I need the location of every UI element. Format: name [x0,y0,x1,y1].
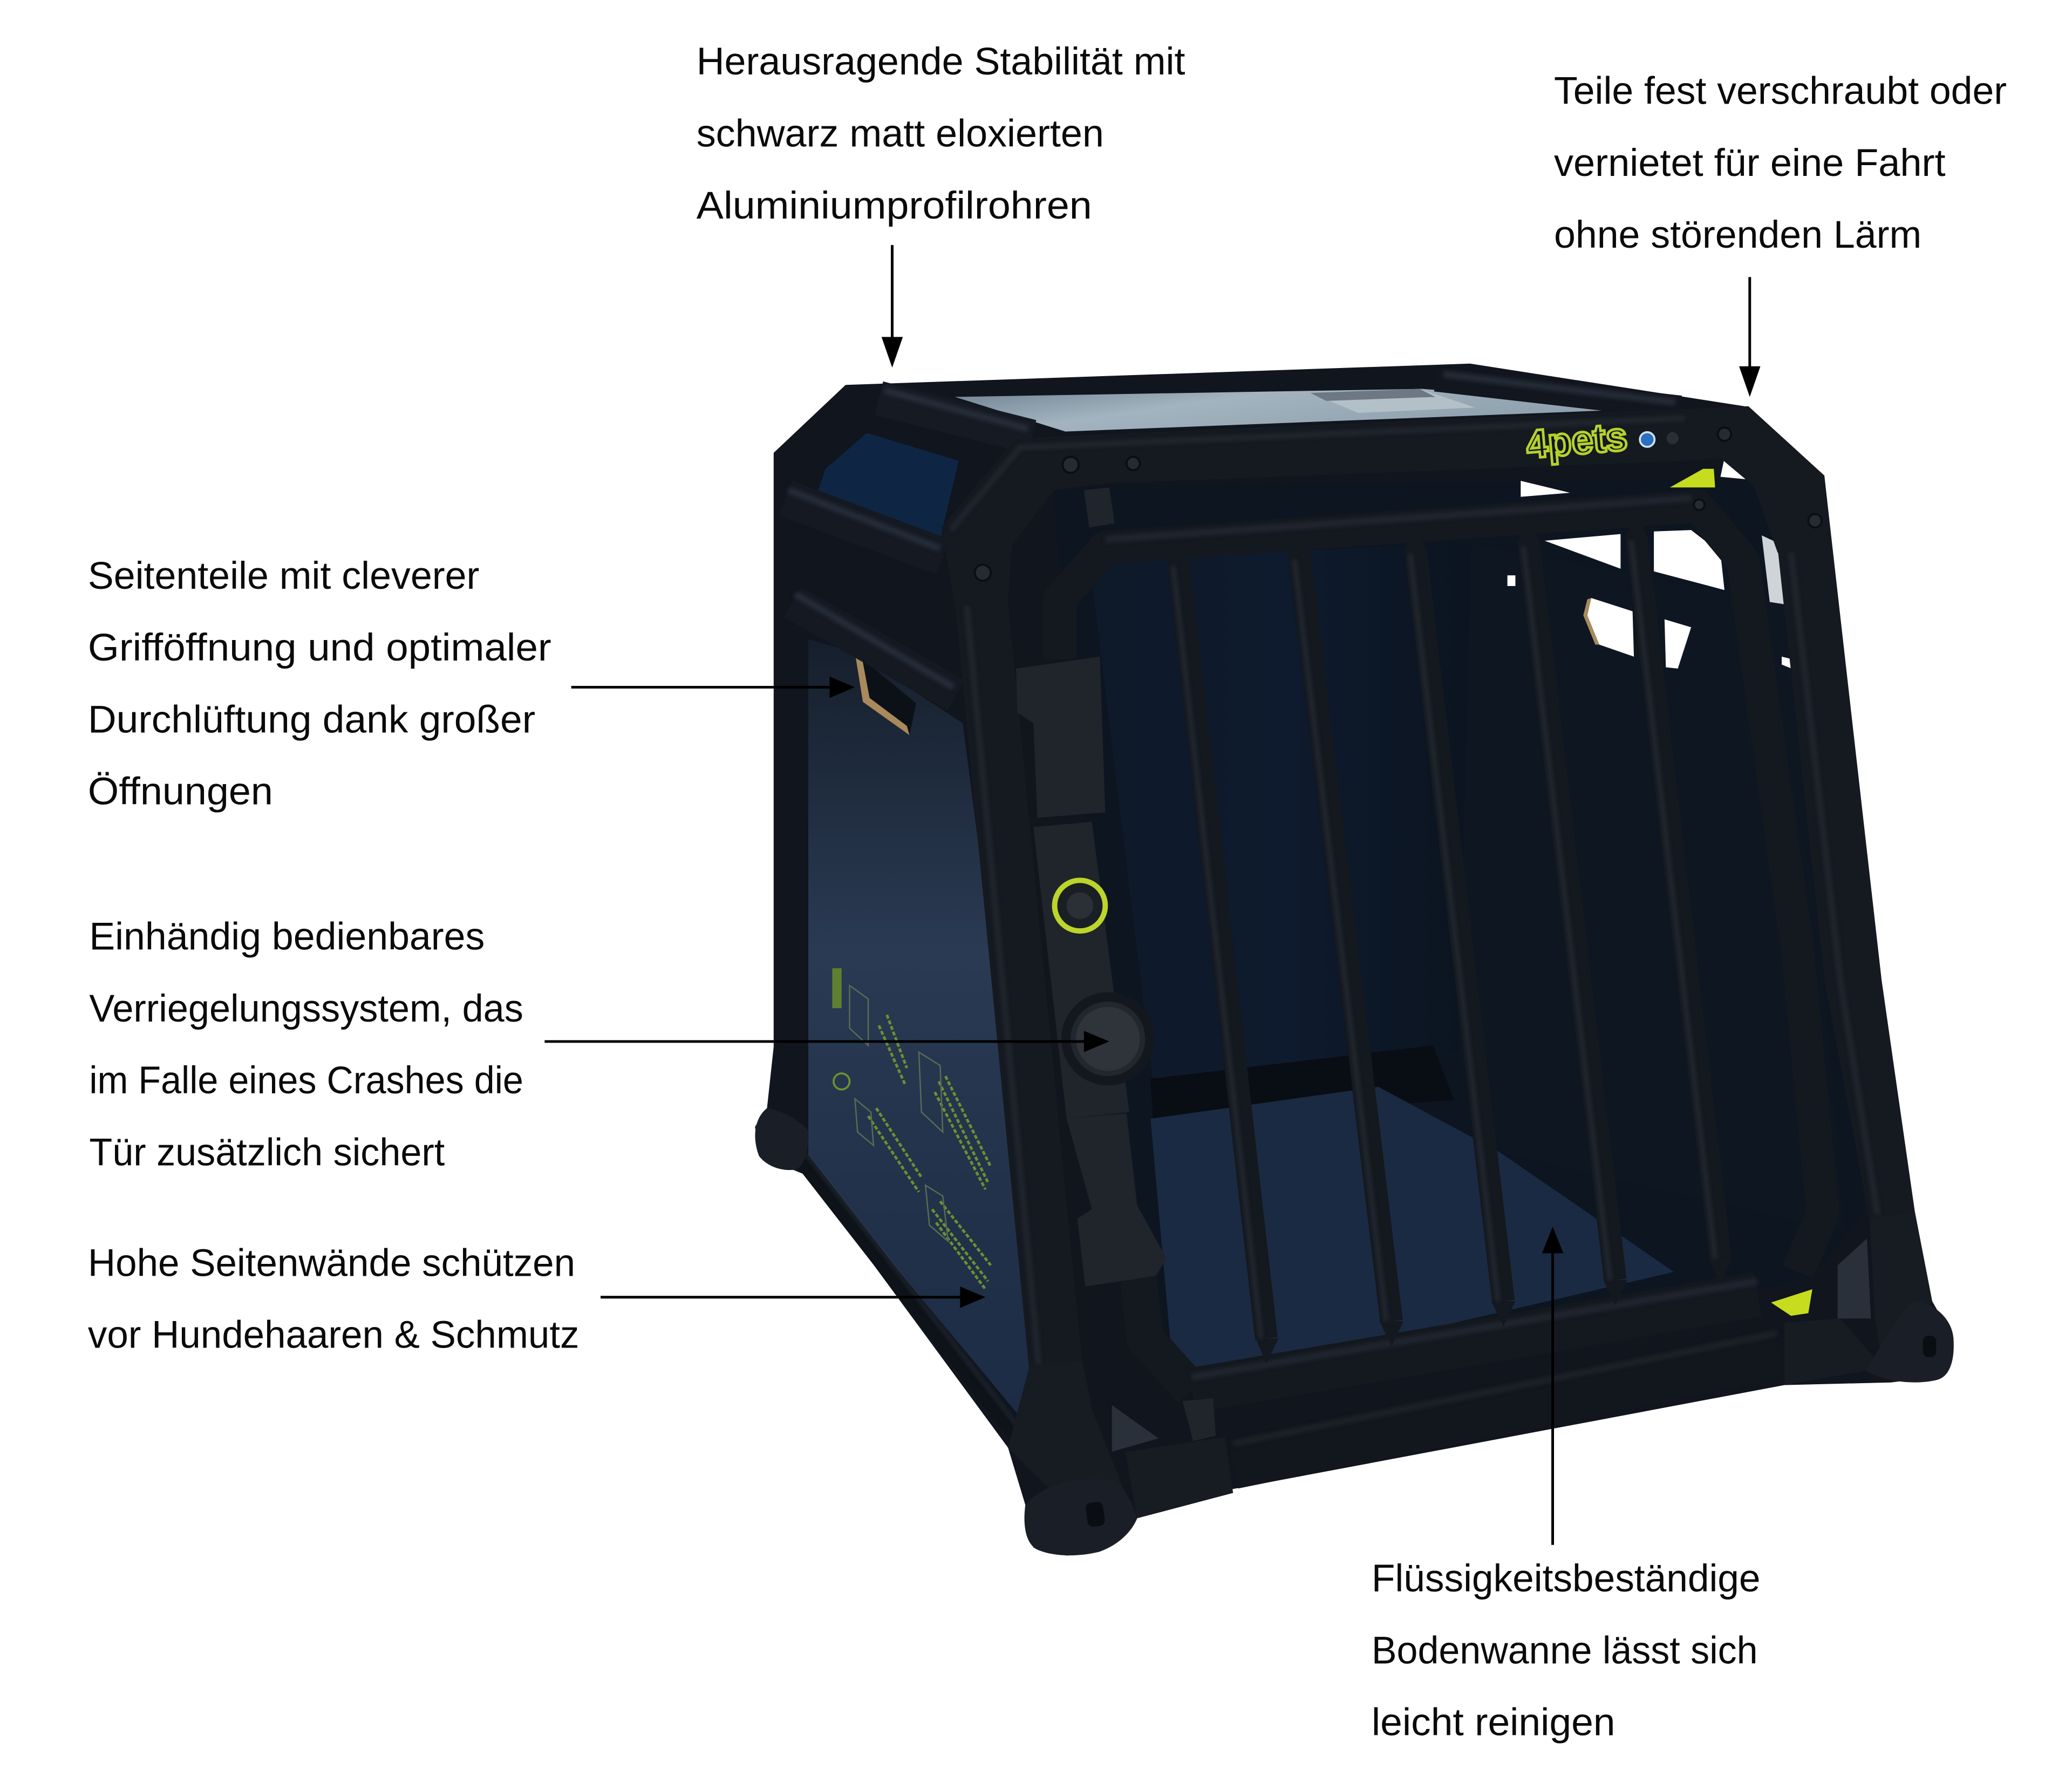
white openings seen through the door [1508,458,1798,670]
text: floor tray: leicht reinigen [1372,1701,1616,1744]
door frame highlights [1105,498,1758,1377]
text: fixed parts: ohne störenden Lärm [1554,213,1921,256]
text: side panels [88,554,551,813]
product: dog crate [755,364,1954,1556]
side panel [808,639,1030,1418]
text: side panels: Grifföffnung und optimaler [88,626,551,669]
handle tan edge [1583,598,1599,644]
label on top panel [1310,389,1475,413]
rear and top rails [786,379,1680,1433]
text: locking system: Verriegelungssystem, das [89,987,523,1030]
yellow latches [1670,469,1812,1316]
floor mat [1150,1087,1674,1388]
green safety print on side panel [832,968,991,1289]
frame highlights [951,418,1878,1365]
text: locking system [89,915,523,1174]
text: stability: Aluminiumprofilrohren [697,184,1092,227]
arrow: to high side wall [601,1287,985,1308]
arrow: to aluminium tube [882,245,903,368]
text: floor tray: Flüssigkeitsbeständige [1372,1557,1761,1600]
bottom front rail [1233,1333,1778,1464]
top rail [1104,409,1687,484]
rail highlights [788,375,1675,1428]
right corner [1687,406,1832,553]
left corner [942,434,1108,606]
text: side panels: Öffnungen [88,770,273,813]
top panel [955,389,1680,432]
bottom connectors and sleeves [1008,1212,1932,1518]
corner screws [974,427,1822,581]
text: side panels: Seitenteile mit cleverer [88,554,479,597]
text: locking system: Tür zusätzlich sichert [89,1131,445,1174]
left post [955,602,1082,1372]
text: stability: Herausragende Stabilität mit [697,40,1185,83]
door frame [1060,506,1823,1391]
text: stability [697,40,1185,227]
arrow: to side grip opening [571,677,855,698]
door bars [1167,514,1733,1364]
text: floor tray: Bodenwanne lässt sich [1372,1629,1758,1672]
arrow: to locking system [544,1031,1109,1052]
logo: 4pets: 4pets [1524,413,1629,467]
gray corner gussets [1112,1239,1871,1452]
lock with green ring [1055,880,1105,931]
text: side panels: Durchlüftung dank großer [88,698,535,741]
right post [1778,549,1915,1220]
crate silhouette [755,364,1953,1556]
arrow: to floor tray [1542,1227,1563,1545]
small door tabs [1084,487,1216,1441]
handle opening [855,652,916,735]
feet [755,1108,1954,1555]
transparent clip [1762,535,1787,604]
text: fixed parts [1554,70,2007,256]
interior right wall [1458,543,1844,1232]
text: high side walls: Hohe Seitenwände schützen [88,1241,575,1284]
text: floor tray [1372,1557,1761,1744]
arrow: to riveted corner [1739,277,1761,397]
text: fixed parts: vernietet für eine Fahrt [1554,141,1946,185]
text: stability: schwarz matt eloxierten [697,112,1104,155]
floor ledge [1150,1045,1454,1121]
door hinge and lock plates [1016,657,1167,1287]
text: high side walls [88,1241,580,1357]
interior back wall [1089,543,1471,1081]
interior [1052,479,1864,1398]
outer front frame [942,406,1915,1372]
text: locking system: Einhändig bedienbares [89,915,485,958]
text: fixed parts: Teile fest verschraubt oder [1554,70,2007,113]
blue indicator dot [1640,432,1654,447]
rivet next to indicator [1667,432,1679,444]
text: locking system: im Falle eines Crashes die [89,1059,523,1102]
blue side window [815,433,959,560]
crash knob [1061,992,1155,1085]
text: high side walls: vor Hundehaaren & Schmutz [88,1314,580,1357]
